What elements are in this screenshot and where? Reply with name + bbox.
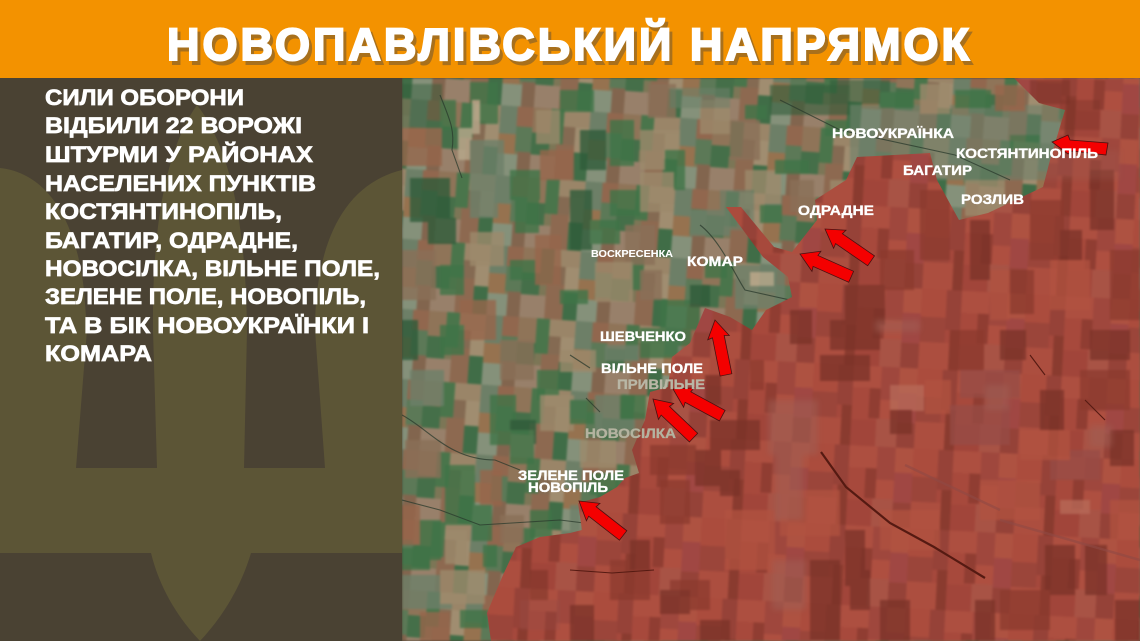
arrow: Шевченко	[707, 319, 732, 376]
label: Зелене Поле: ЗЕЛЕНЕ ПОЛЕ	[518, 467, 624, 483]
label: Багатир: БАГАТИР	[903, 162, 972, 178]
left text block: КОМАРА	[45, 341, 152, 366]
rivers	[402, 95, 1010, 525]
left text block: ВІДБИЛИ 22 ВОРОЖІ	[45, 113, 302, 138]
arrow: Костянтинопіль	[1052, 135, 1108, 155]
left text block: НОВОСІЛКА, ВІЛЬНЕ ПОЛЕ,	[45, 256, 380, 281]
left text block	[45, 85, 380, 366]
arrow: Привільне	[672, 387, 726, 422]
left panel with trident watermark	[0, 78, 402, 641]
label: Воскресенка: ВОСКРЕСЕНКА	[591, 248, 673, 260]
left text block: ШТУРМИ У РАЙОНАХ	[45, 142, 313, 167]
label: Комар: КОМАР	[687, 253, 743, 269]
left text block: НАСЕЛЕНИХ ПУНКТІВ	[45, 171, 316, 196]
towns in occupied area	[768, 150, 1120, 610]
label: Привільне: ПРИВІЛЬНЕ	[617, 376, 705, 392]
map place labels	[518, 125, 1098, 495]
arrow: Одрадне east	[824, 228, 875, 266]
satellite map	[402, 78, 1140, 641]
icon: trident emblem	[0, 105, 402, 641]
ravines	[570, 355, 1140, 578]
left text block: ЗЕЛЕНЕ ПОЛЕ, НОВОПІЛЬ,	[45, 284, 366, 309]
left text block: СИЛИ ОБОРОНИ	[45, 85, 244, 110]
label: Новопіль: НОВОПІЛЬ	[528, 479, 608, 495]
left text block: КОСТЯНТИНОПІЛЬ,	[45, 199, 282, 224]
title: НОВОПАВЛІВСЬКИЙ НАПРЯМОК	[167, 19, 970, 70]
label: Шевченко: ШЕВЧЕНКО	[600, 328, 686, 344]
arrow: Одрадне south	[799, 250, 854, 283]
label: Костянтинопіль: КОСТЯНТИНОПІЛЬ	[956, 145, 1098, 161]
arrow: Новопіль	[578, 500, 628, 541]
header banner	[0, 0, 1140, 78]
map fields	[402, 78, 1140, 641]
left text block: БАГАТИР, ОДРАДНЕ,	[45, 228, 298, 253]
arrow: Новосілка	[652, 398, 698, 442]
left text block: ТА В БІК НОВОУКРАЇНКИ І	[45, 313, 369, 338]
label: Одрадне: ОДРАДНЕ	[798, 202, 874, 218]
label: Новосілка: НОВОСІЛКА	[585, 425, 676, 441]
occupied field blocks	[520, 80, 1140, 641]
label: Розлив: РОЗЛИВ	[961, 191, 1024, 207]
tone overlay	[630, 100, 1138, 640]
occupied territory	[487, 78, 1140, 641]
label: Новоукраїнка: НОВОУКРАЇНКА	[832, 125, 954, 141]
label: Вільне Поле: ВІЛЬНЕ ПОЛЕ	[601, 360, 703, 376]
